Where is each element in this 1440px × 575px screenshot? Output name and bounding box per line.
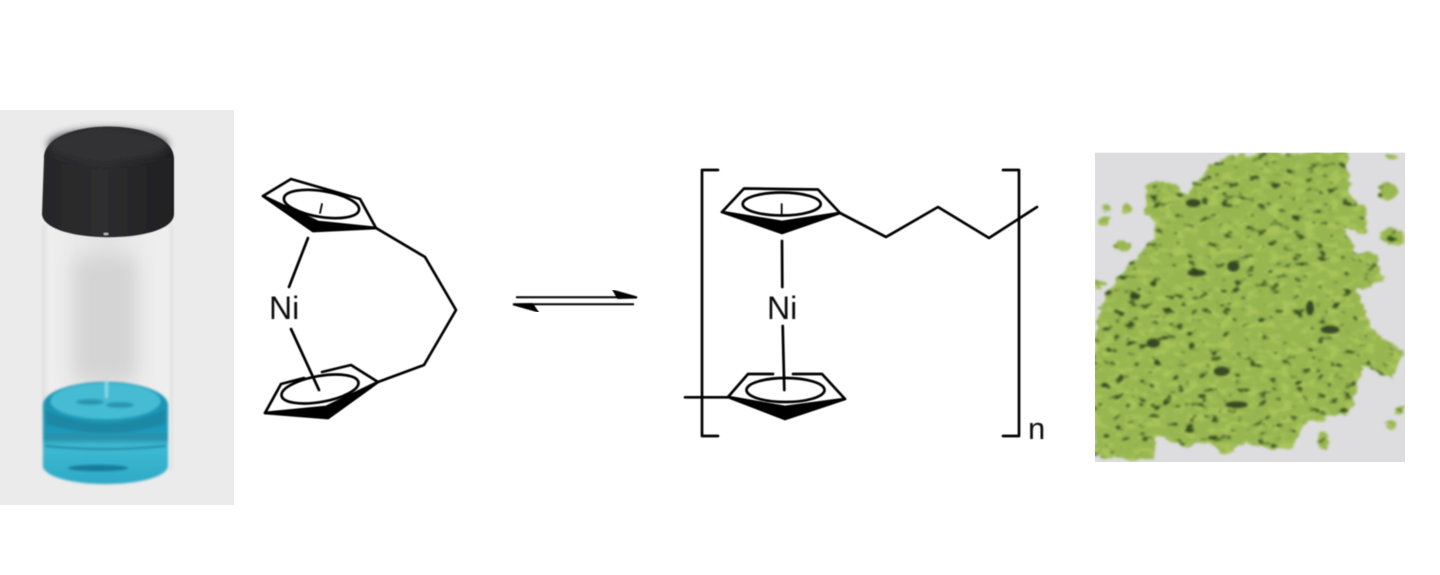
photo backdrop xyxy=(0,110,234,505)
label: Ni: Ni xyxy=(767,290,797,326)
panel: green powder photo xyxy=(1093,151,1405,462)
photo backdrop xyxy=(1095,153,1405,462)
upper cyclopentadienyl ring xyxy=(263,179,376,231)
reverse arrow xyxy=(513,304,634,311)
label: subscript n: n xyxy=(1028,411,1045,446)
forward arrow xyxy=(516,291,637,298)
panel: polymer structure xyxy=(685,170,1045,446)
bond: upper ring to Ni xyxy=(781,241,784,287)
right bracket xyxy=(1003,170,1019,436)
butyl bridge chain xyxy=(376,228,456,382)
panel: vial photo xyxy=(0,110,234,505)
label: Ni: Ni xyxy=(269,290,299,326)
black vial cap xyxy=(42,126,174,237)
panel: ring-closed ansa nickelocene structure xyxy=(263,179,456,418)
powder pile xyxy=(1093,151,1405,460)
central reflection xyxy=(74,256,136,381)
lower cyclopentadienyl ring xyxy=(265,365,378,418)
upper cyclopentadienyl ring xyxy=(722,188,840,233)
butyl chain crossing bracket xyxy=(840,207,1037,238)
left stub bond xyxy=(685,396,728,399)
lower cyclopentadienyl ring xyxy=(728,374,845,419)
glass vial body xyxy=(42,225,173,470)
bond: Ni to lower ring xyxy=(783,326,784,390)
bond: upper ring to Ni xyxy=(289,238,308,287)
bond: Ni to lower ring xyxy=(291,329,319,390)
dark crevices in powder xyxy=(1130,199,1339,408)
blue liquid xyxy=(43,378,168,484)
equilibrium arrows xyxy=(513,291,637,311)
left bracket xyxy=(702,170,718,436)
